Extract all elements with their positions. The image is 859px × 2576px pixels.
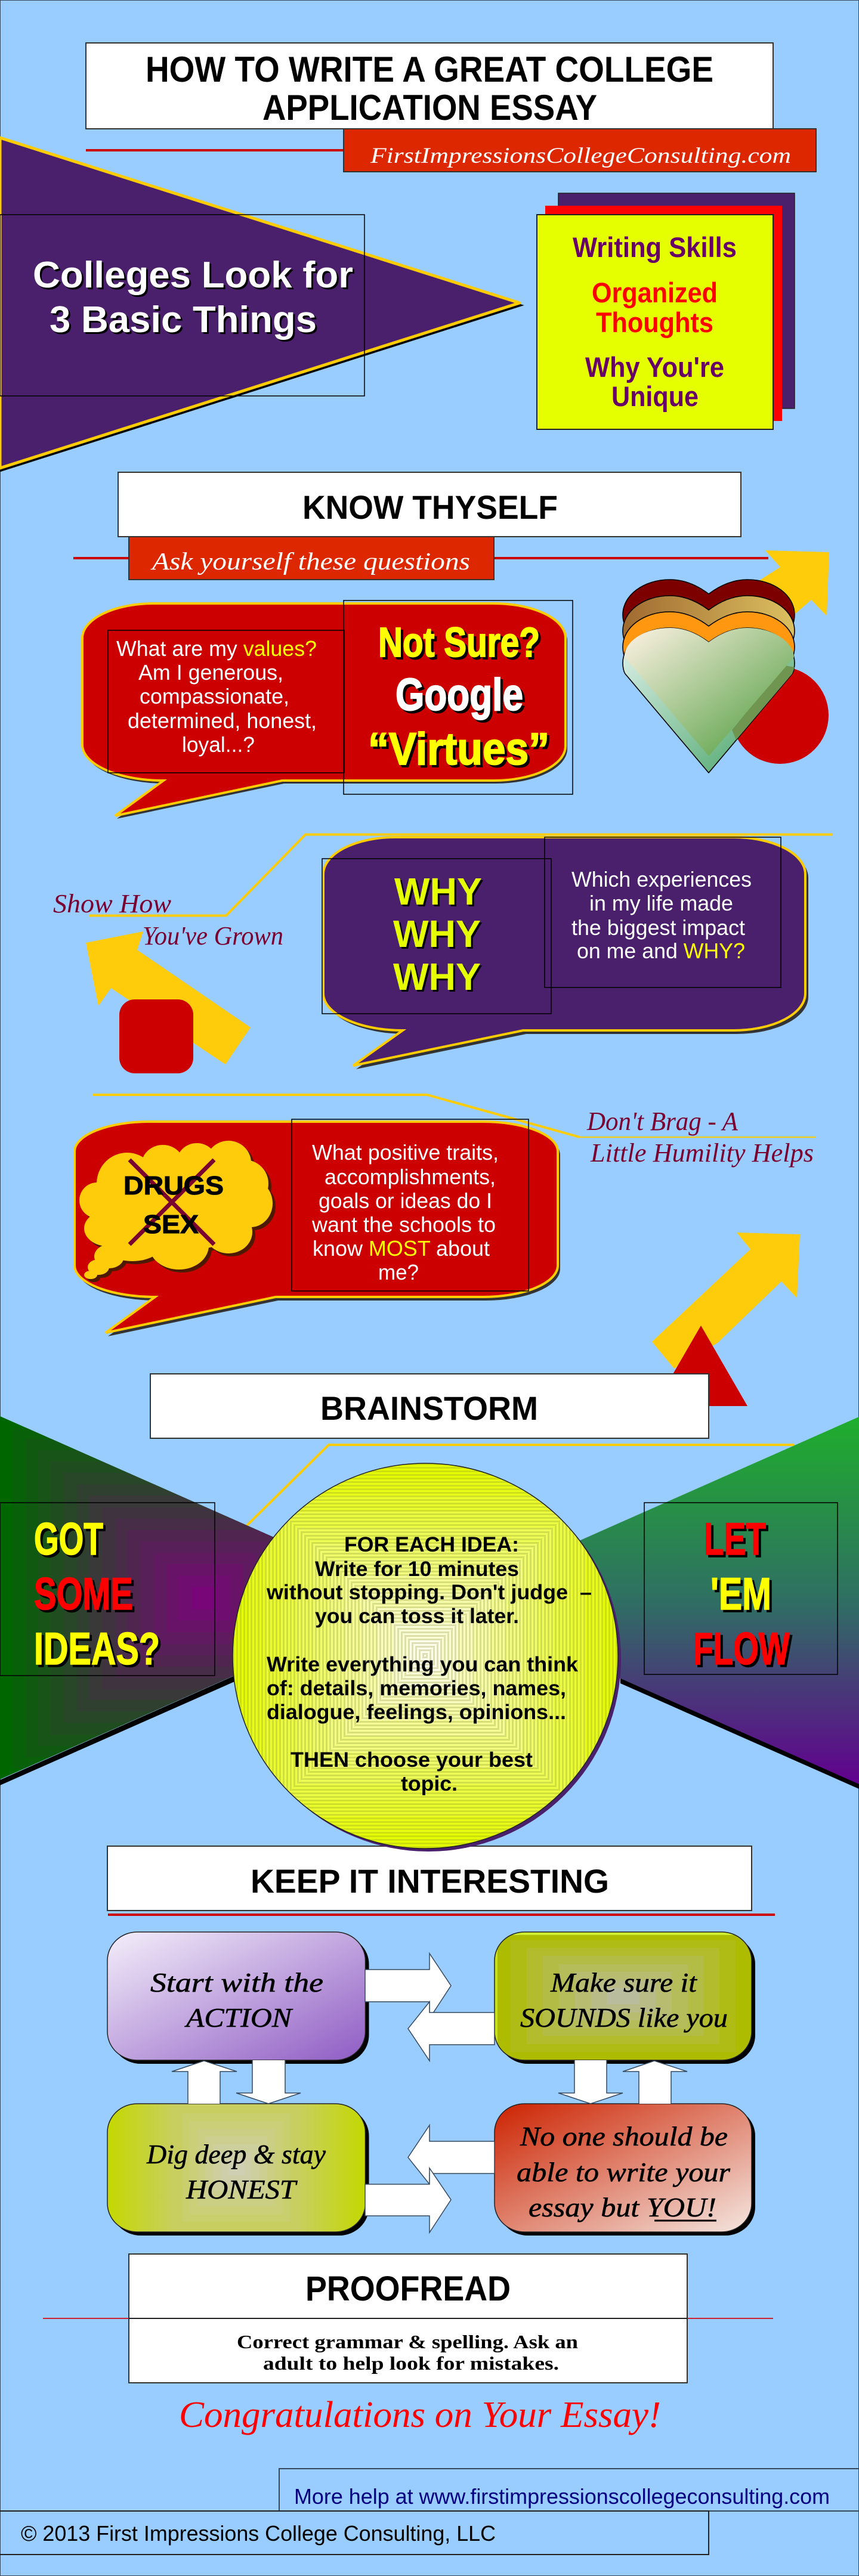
speech bubble: positive traits — [75, 1119, 560, 1336]
callout line: brainstorm — [246, 1445, 795, 1526]
arrow: yellow up right — [716, 550, 829, 662]
yellow circle: brainstorm instructions: topic. — [401, 1772, 458, 1795]
arrow: sounds down to last card — [558, 2060, 623, 2104]
yellow circle: brainstorm instructions: dialogue, feelings, opinions... — [267, 1701, 566, 1724]
heading: keep it interesting — [107, 1846, 775, 1916]
speech bubble: why: in my life made — [589, 891, 733, 915]
banner: ask yourself — [73, 537, 768, 580]
speech bubble: why: WHY — [393, 955, 481, 998]
heading: brainstorm: BRAINSTORM — [320, 1389, 538, 1427]
note: show how you've grown: Show How — [53, 889, 172, 918]
title box: APPLICATION ESSAY — [262, 88, 597, 128]
yellow circle: brainstorm instructions: Write for 10 minutes — [315, 1558, 519, 1581]
speech bubble: values: compassionate, — [140, 684, 289, 708]
card: start with the action — [107, 1932, 369, 2064]
title box: HOW TO WRITE A GREAT COLLEGE — [146, 49, 713, 89]
stacked cards: three basic things: Thoughts — [596, 306, 713, 338]
card: no one should be able — [495, 2104, 755, 2236]
arrow: sounds to start — [408, 2002, 495, 2061]
card: make sure it sounds like you — [495, 1932, 755, 2064]
heading: know thyself: KNOW THYSELF — [302, 488, 558, 526]
footer: more help link: More help at www.firstimpressionscollegeconsulting.com — [294, 2484, 830, 2509]
callout line: show how — [89, 835, 833, 916]
panel: proofread: adult to help look for mistakes. — [263, 2352, 559, 2374]
heading: know thyself — [118, 472, 741, 537]
stacked cards: three basic things: Why You're — [585, 351, 724, 383]
note: show how you've grown: You've Grown — [143, 921, 283, 950]
arrow: start to sounds — [365, 1953, 451, 2018]
note: don't brag — [586, 1107, 814, 1168]
website banner — [86, 129, 816, 172]
card: dig deep and stay honest — [107, 2104, 369, 2236]
speech bubble: values: “Virtues” — [368, 724, 549, 775]
yellow circle: brainstorm instructions: you can toss it later. — [315, 1605, 519, 1628]
speech bubble: values: determined, honest, — [128, 708, 317, 733]
speech bubble: positive traits: goals or ideas do I — [319, 1188, 492, 1213]
speech bubble: values: Am I generous, — [138, 660, 283, 685]
icon: red triangle — [654, 1326, 747, 1406]
card: no one should be able: able to write your — [517, 2157, 731, 2187]
left bow-tie panel: got some ideas: IDEAS? — [34, 1624, 160, 1674]
card: make sure it sounds like you: SOUNDS like you — [520, 2002, 728, 2033]
stacked cards: three basic things: Unique — [611, 380, 699, 412]
title box — [86, 43, 773, 129]
speech bubble: why: the biggest impact — [571, 915, 745, 940]
speech bubble: positive traits: accomplishments, — [325, 1165, 496, 1189]
panel: proofread: PROOFREAD — [305, 2270, 511, 2308]
speech bubble: why — [322, 837, 808, 1069]
right bow-tie panel: let 'em flow: LET — [704, 1514, 766, 1565]
icon: thought cloud with crossed-out words: SEX — [143, 1210, 199, 1239]
arrow: yellow big up right — [652, 1233, 800, 1368]
speech bubble: values: loyal...? — [182, 732, 255, 757]
left bow-tie panel: got some ideas: GOT — [34, 1514, 103, 1565]
speech bubble: positive traits: me? — [378, 1260, 419, 1284]
speech bubble: why: on me and WHY? — [577, 939, 745, 963]
card: make sure it sounds like you: Make sure it — [550, 1967, 697, 1998]
yellow circle: brainstorm instructions: Write everything you can think — [267, 1653, 579, 1676]
speech bubble: values: Google — [395, 670, 523, 720]
heading: brainstorm — [150, 1374, 709, 1438]
icon: red circle — [731, 667, 829, 764]
speech bubble: positive traits: want the schools to — [311, 1212, 496, 1237]
speech bubble: positive traits: What positive traits, — [312, 1140, 499, 1165]
left bow-tie panel: got some ideas — [0, 1416, 273, 1785]
right bow-tie panel: let 'em flow: FLOW — [693, 1624, 790, 1674]
card: dig deep and stay honest: HONEST — [186, 2174, 298, 2205]
icon: layered hearts — [623, 580, 795, 773]
website banner: FirstImpressionsCollegeConsulting.com — [370, 144, 791, 168]
stacked cards: three basic things: Writing Skills — [573, 231, 737, 263]
card: start with the action: Start with the — [150, 1967, 323, 1998]
heading: keep it interesting: KEEP IT INTERESTING — [251, 1862, 609, 1900]
purple triangle: colleges look for: Colleges Look for — [33, 255, 353, 296]
card: no one should be able: No one should be — [520, 2121, 728, 2151]
card: start with the action: ACTION — [184, 2002, 293, 2033]
footer: more help link — [279, 2469, 859, 2511]
yellow circle: brainstorm instructions: without stopping. Don't judge – — [266, 1581, 592, 1604]
card: dig deep and stay honest: Dig deep & stay — [146, 2139, 326, 2169]
icon: thought cloud with crossed-out words: DRUGS — [123, 1171, 224, 1200]
closing message: Congratulations on Your Essay! — [179, 2395, 661, 2435]
note: show how you've grown — [53, 889, 283, 950]
speech bubble: values — [82, 600, 573, 819]
speech bubble: why: WHY — [393, 912, 481, 955]
arrow: last card up to sounds — [623, 2061, 687, 2104]
arrow: honest up to start — [172, 2061, 237, 2104]
note: don't brag: Little Humility Helps — [590, 1138, 814, 1168]
speech bubble: why: Which experiences — [571, 867, 752, 891]
footer: copyright: © 2013 First Impressions College Consulting, LLC — [21, 2521, 496, 2546]
speech bubble: why: WHY — [394, 870, 482, 913]
stacked cards: three basic things: Organized — [592, 277, 718, 308]
speech bubble: values: Not Sure? — [378, 619, 540, 665]
right bow-tie panel: let 'em flow — [444, 1417, 859, 1789]
purple triangle: colleges look for — [0, 138, 520, 470]
left bow-tie panel: got some ideas: SOME — [34, 1569, 133, 1620]
yellow circle: brainstorm instructions: THEN choose your best — [291, 1748, 533, 1772]
card: no one should be able: essay but YOU! — [529, 2192, 716, 2222]
icon: red rounded square — [119, 999, 193, 1073]
stacked cards: three basic things — [537, 193, 795, 429]
speech bubble: positive traits: know MOST about — [313, 1236, 490, 1261]
purple triangle: colleges look for: 3 Basic Things — [50, 299, 317, 340]
yellow circle: brainstorm instructions — [233, 1463, 621, 1852]
yellow circle: brainstorm instructions: of: details, memories, names, — [267, 1677, 566, 1700]
note: don't brag: Don't Brag - A — [586, 1107, 739, 1136]
speech bubble: values: What are my values? — [116, 636, 317, 661]
arrow: last card to honest — [408, 2125, 495, 2184]
right bow-tie panel: let 'em flow: 'EM — [710, 1569, 771, 1620]
arrow: honest to last card — [365, 2168, 451, 2233]
arrow: yellow up left — [86, 931, 251, 1064]
yellow circle: brainstorm instructions: FOR EACH IDEA: — [344, 1533, 519, 1556]
arrow: start down to honest — [236, 2060, 301, 2104]
callout line: don't brag — [93, 1095, 816, 1137]
footer: copyright — [0, 2511, 709, 2555]
panel: proofread: Correct grammar & spelling. Ask an — [237, 2331, 578, 2352]
banner: ask yourself: Ask yourself these questions — [150, 547, 470, 575]
icon: thought cloud with crossed-out words — [79, 1141, 273, 1279]
panel: proofread — [43, 2254, 773, 2383]
